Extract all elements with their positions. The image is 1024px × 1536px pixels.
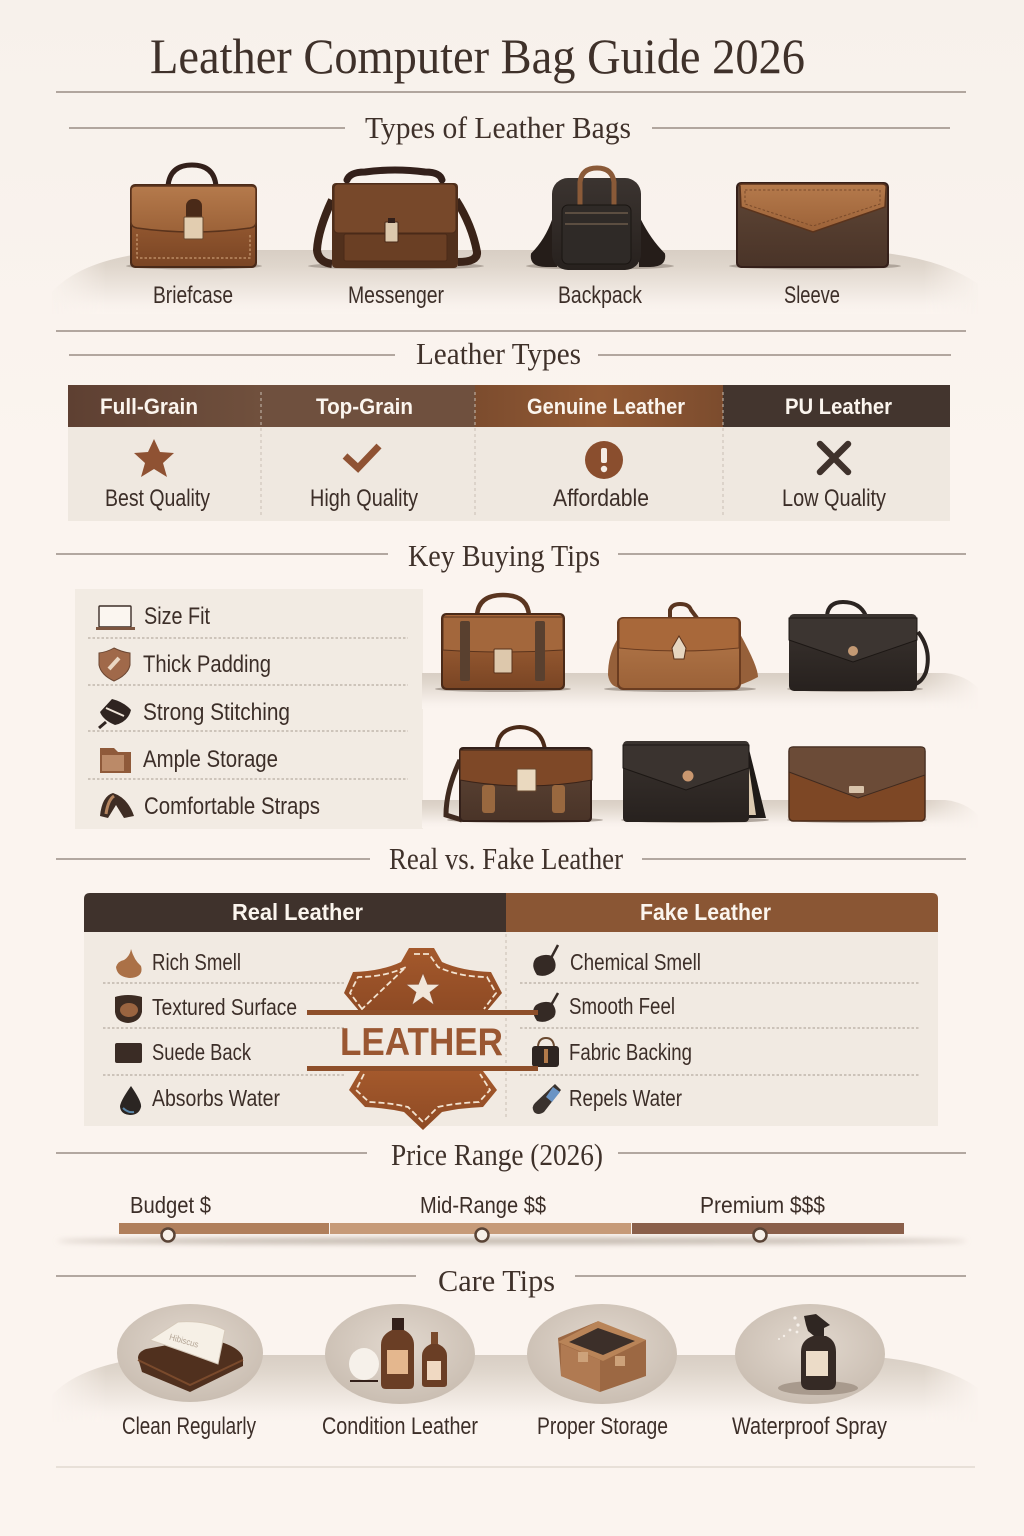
bag: tan satchel	[435, 595, 571, 692]
icon: stitching	[99, 699, 131, 728]
section: leather types	[68, 336, 951, 521]
panel: tips list: Thick Padding	[143, 651, 271, 678]
panel: comparison table: Fake Leather	[640, 899, 771, 925]
panel: tips list: Ample Storage	[143, 746, 278, 773]
icon: repels water	[533, 1084, 561, 1114]
panel: comparison table: Absorbs Water	[152, 1085, 280, 1111]
icon: shield	[99, 648, 130, 681]
bag: sleeve	[729, 182, 901, 270]
icon: fabric backing	[532, 1038, 559, 1067]
section: types of leather bags	[52, 110, 978, 314]
care: waterproof spray	[732, 1304, 887, 1440]
section: real vs fake leather	[56, 841, 966, 1130]
panel: comparison table: Real Leather	[232, 899, 363, 925]
section: price range	[56, 1137, 967, 1244]
price label: budget: Budget $	[130, 1192, 211, 1218]
care: condition leather	[322, 1304, 478, 1440]
icon: chemical smell	[533, 945, 558, 976]
column: genuine leather	[527, 394, 685, 512]
column: pu leather: PU Leather	[785, 394, 892, 419]
column: full-grain: Full-Grain	[100, 394, 198, 419]
care: clean regularly: Hibiscus	[168, 1332, 200, 1350]
label: backpack: Backpack	[558, 282, 643, 309]
care: proper storage: Proper Storage	[537, 1413, 668, 1440]
panel: tips list	[75, 589, 423, 829]
care: waterproof spray: Waterproof Spray	[732, 1413, 887, 1440]
icon: absorbs water	[120, 1086, 141, 1115]
badge: leather emblem: LEATHER	[340, 1021, 503, 1064]
icon: straps	[100, 793, 134, 818]
panel: tips list: Size Fit	[144, 603, 210, 630]
title: Leather Computer Bag Guide 2026	[150, 28, 805, 84]
section: key buying tips	[56, 538, 978, 829]
price label: premium: Premium $$$	[700, 1192, 825, 1218]
column: full-grain: Best Quality	[105, 485, 210, 512]
panel: comparison table: Fabric Backing	[569, 1039, 692, 1065]
panel: comparison table: Repels Water	[569, 1085, 682, 1111]
icon: suede back	[115, 1043, 142, 1063]
label: briefcase: Briefcase	[153, 282, 233, 309]
bag: backpack	[526, 168, 674, 270]
bag: black flap bag	[787, 602, 928, 692]
bag: rounded satchel	[604, 604, 758, 692]
section: care tips	[52, 1263, 978, 1440]
panel: tips list: Strong Stitching	[143, 699, 290, 726]
bag: black envelope	[621, 741, 769, 823]
heading: key buying tips: Key Buying Tips	[408, 538, 600, 573]
bag: briefcase	[126, 165, 262, 270]
care: clean regularly	[117, 1304, 263, 1440]
column: genuine leather: Genuine Leather	[527, 394, 685, 419]
bag: brown envelope	[787, 747, 927, 823]
icon: smooth feel	[533, 993, 558, 1022]
heading: care tips: Care Tips	[438, 1263, 555, 1298]
panel: comparison table: Chemical Smell	[570, 949, 701, 975]
label: sleeve: Sleeve	[784, 282, 840, 309]
icon: storage	[100, 748, 131, 773]
heading: price range: Price Range (2026)	[391, 1137, 603, 1172]
heading: leather types: Leather Types	[416, 336, 581, 371]
column: top-grain: Top-Grain	[316, 394, 413, 419]
icon: rich smell	[116, 949, 142, 978]
bag: two-tone satchel	[446, 727, 603, 823]
panel: comparison table: Smooth Feel	[569, 993, 675, 1019]
panel: tips list: Comfortable Straps	[144, 793, 320, 820]
column: top-grain: High Quality	[310, 485, 418, 512]
label: messenger: Messenger	[348, 282, 444, 309]
care: clean regularly: Clean Regularly	[122, 1413, 256, 1440]
column: pu leather	[782, 394, 892, 512]
panel: comparison table: Rich Smell	[152, 949, 241, 975]
panel: comparison table: Suede Back	[152, 1039, 251, 1065]
column: top-grain	[310, 394, 418, 512]
heading: types of leather bags: Types of Leather Bags	[365, 110, 631, 145]
badge: leather emblem	[307, 948, 538, 1130]
column: genuine leather: Affordable	[553, 485, 649, 512]
column: pu leather: Low Quality	[782, 485, 886, 512]
column: full-grain	[100, 394, 210, 512]
care: condition leather: Condition Leather	[322, 1413, 478, 1440]
icon: laptop	[96, 606, 135, 630]
panel: comparison table	[84, 893, 938, 1126]
price label: mid-range: Mid-Range $$	[420, 1192, 546, 1218]
icon: textured surface	[115, 995, 142, 1023]
price bar	[119, 1223, 904, 1242]
bag: messenger	[308, 170, 484, 270]
panel: comparison table: Textured Surface	[152, 994, 297, 1020]
heading: real vs fake: Real vs. Fake Leather	[389, 841, 624, 876]
care: proper storage	[527, 1304, 677, 1440]
